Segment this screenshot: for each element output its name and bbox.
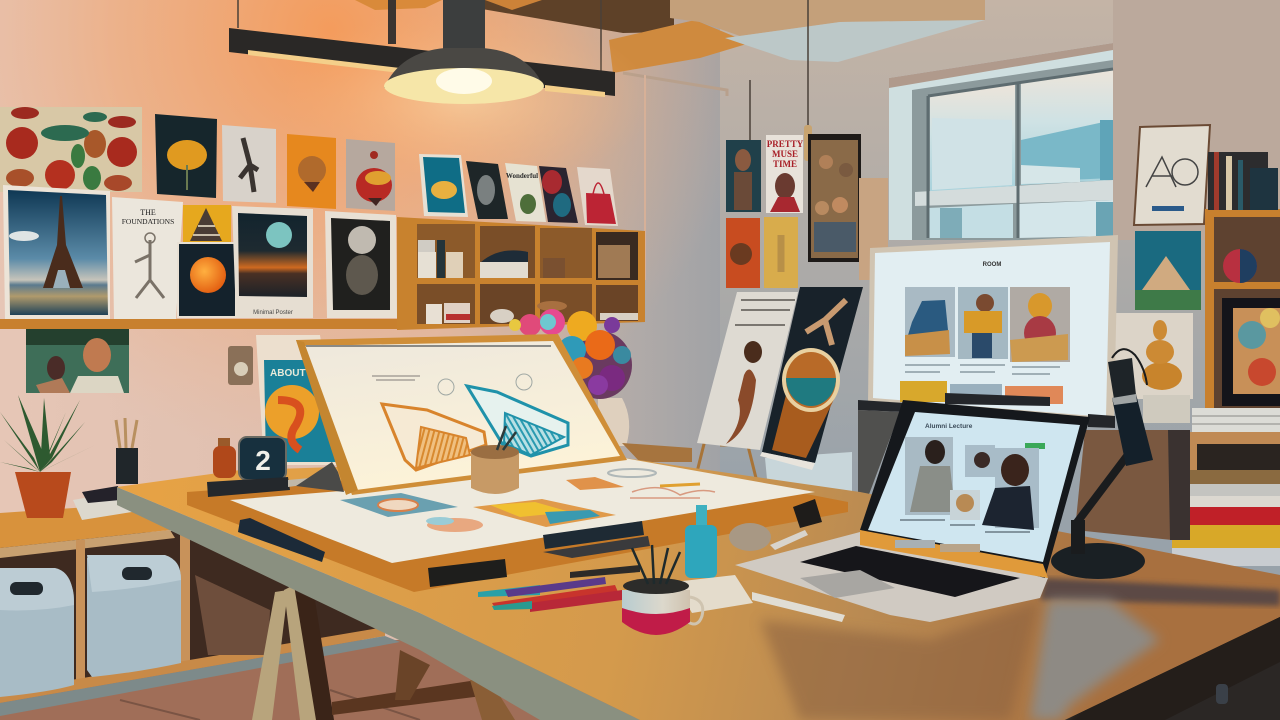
sawhorse legs [252,585,515,720]
poster: dark leaf [466,161,508,219]
table top [117,458,1280,720]
marker [207,477,290,497]
cardboard panel behind the laptop [1075,430,1190,540]
laptop base [735,532,1048,622]
flat paper sheet [230,458,815,563]
white bucket [765,452,852,492]
wall art: portrait photos [726,134,888,288]
tilted drawing board [296,334,627,495]
roller [238,518,325,562]
bookshelf: right [1172,152,1280,566]
plant [0,395,95,518]
poster: red bag [577,167,618,226]
drafting board assembly [187,334,848,592]
monitor [868,235,1118,420]
board stand [296,462,344,492]
pipe on the corner wall [644,75,646,280]
shelf board [0,627,385,703]
poster: moon landscape: Minimal Poster [253,310,293,316]
white pen [752,592,845,622]
side table [622,443,692,462]
long wood shelf [0,319,400,329]
ceiling structure [355,0,985,96]
poster: woman profile [697,292,798,450]
white book [674,575,753,613]
poster: spinning top [346,139,395,211]
poster: pretty title: PRETTY [767,139,804,149]
poster: figure sketch [112,197,183,319]
silver pen [770,530,808,550]
table edge [117,487,640,720]
poster: stone stack [183,205,231,242]
poster: patterned strip [859,178,888,280]
teal bottle [685,505,717,578]
table shadow and reflection [760,578,1280,720]
small photo under shelf [26,329,129,393]
leaning orange poster: ABOUT [270,368,306,379]
books on shelf [73,486,132,520]
storage bin: middle [87,555,181,677]
laptop hinge [860,530,1048,578]
microphone and arm [1051,349,1153,579]
mug with pencils [622,545,703,635]
rolled mat and pens on table [238,518,650,612]
brush cup on shelf [116,418,138,484]
poster: figure and orb [760,287,863,470]
poster: orange figure [726,218,760,288]
poster: woman portrait [726,140,761,212]
dark roll [543,521,644,549]
poster row: lower left [3,185,397,319]
laptop [735,400,1090,622]
poster: figure sketch: THE [140,208,156,217]
poster: lettering [505,163,546,222]
laptop: Alumni Lecture [925,423,973,430]
poster: pretty title: TIME [773,159,797,169]
poster row: top left [0,107,618,226]
poster: right wall framed line art [1134,125,1210,225]
poster: dark planet [325,211,397,318]
poster: Eiffel tower [3,185,110,319]
black clip [793,499,822,528]
sketch: left wedge [382,404,486,470]
poster: orange balloon [287,134,336,209]
storage bin: left [0,568,74,697]
ink bottle and number block [207,437,344,497]
notebook [543,536,650,558]
pendant lamp [384,0,544,104]
poster: pyramid [1135,231,1201,310]
track light [229,0,615,97]
monitor: ROOM [983,262,1001,268]
wall: right [720,0,1280,600]
poster: floral [0,107,142,192]
bouquet and vase [509,309,632,446]
lower left shelf and storage [0,505,400,716]
lamp glow on the wall [274,10,654,190]
poster: figure sketch: FOUNDATIONS [122,217,174,226]
metal bowl [729,523,771,551]
pencil cup on the board [471,426,519,494]
poster: yellow figure [764,217,798,288]
poster: teal leaf [419,154,468,217]
wood base [187,460,848,592]
easel legs [697,440,760,478]
poster: pretty title [766,135,804,213]
laptop screen [860,400,1090,578]
poster: moon landscape [232,206,313,318]
baseboard [0,636,400,716]
poster: sculpture [1115,313,1193,423]
wicker basket [195,575,270,655]
monitor stand bar [858,393,1115,497]
poster: group photo [808,134,861,262]
red pens [492,585,622,612]
cube shelving unit [397,217,645,330]
wall: left [0,0,725,660]
poster: lettering: Wonderful [506,172,538,180]
sketches on paper [340,469,715,532]
sketch: right wedge [467,386,568,456]
wires [238,0,808,150]
leaning orange poster [256,335,340,465]
poster: orange planet [177,242,237,318]
poster: pretty title: MUSE [772,149,798,159]
teal and purple pen [478,577,606,597]
cord hook [804,125,812,161]
small desk items [674,499,845,622]
dark tube [428,559,507,587]
window [889,43,1113,240]
keyboard [800,546,1020,597]
poster: dark floral [539,166,578,223]
wheel under table [1216,684,1228,704]
poster: giraffe [222,125,276,203]
floor [0,620,1280,720]
side easel posters [622,287,863,492]
number block: 2 [255,445,271,476]
poster: yellow flower [155,114,217,198]
wall lantern [228,346,253,385]
table right edge [1065,617,1280,720]
touchpad [800,570,895,598]
amber bottle [213,438,236,478]
